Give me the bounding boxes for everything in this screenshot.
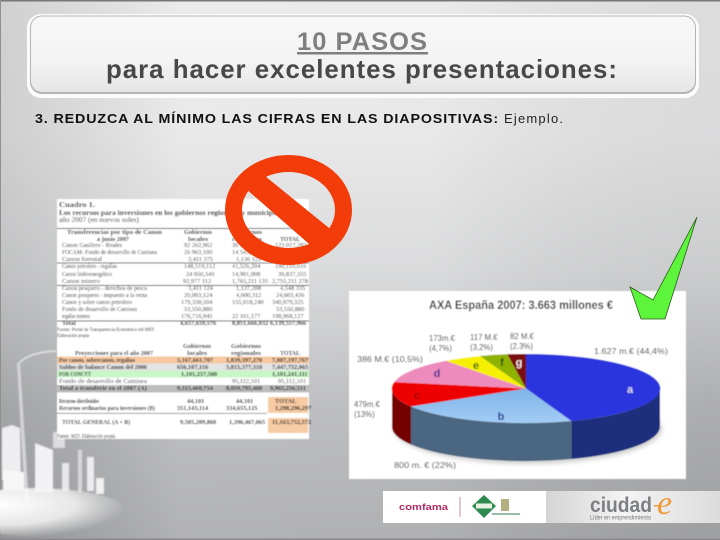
logo: ciudad-e: Líder en emprendimiento <box>590 516 652 522</box>
value labels: 173m.€ <box>429 334 456 343</box>
table lower rows: TOTAL <box>280 350 300 357</box>
table lower rows: Gobiernos <box>183 343 212 350</box>
value labels: 82 M.€ <box>510 332 534 341</box>
slice letters <box>414 357 634 423</box>
table lower rows: 95,112,101 <box>232 378 260 385</box>
table upper rows: regionales <box>232 236 263 243</box>
pie sides <box>392 388 660 461</box>
table upper rows: Gobiernos <box>232 229 263 236</box>
table upper rows <box>57 229 308 339</box>
table upper rows: TOTAL <box>280 236 300 243</box>
data table: dense figures to avoid: Fuente: MEF. Elaboración propia <box>57 433 115 440</box>
table upper rows: 30 754,321 <box>232 242 260 249</box>
table heading: año 2007 (en nuevos soles) <box>59 216 140 224</box>
pie shadow <box>394 394 662 464</box>
table lower rows: TOTAL <box>275 398 296 405</box>
table lower rows: 1,101,241,111 <box>272 371 308 378</box>
value labels <box>354 332 668 470</box>
table upper rows: 198,968,127 <box>272 313 303 320</box>
table upper rows: Canon pesquero - impuesto a la renta <box>62 292 147 299</box>
table lower rows: locales <box>187 350 208 357</box>
table upper rows: locales <box>188 236 209 243</box>
slice letters: g <box>516 357 522 369</box>
value labels: (2.3%) <box>510 342 533 351</box>
table upper rows: 14 545,210 <box>232 249 260 256</box>
table heading: Los recursos para inversiones en los gobiernos regionales y municipalidades <box>59 209 299 217</box>
table colored rows <box>57 356 309 433</box>
subheading: Ejemplo. <box>504 111 563 126</box>
table upper rows: 4,547 500 <box>280 256 305 263</box>
value labels: (13%) <box>354 410 375 419</box>
table upper rows: 4,548 335 <box>280 285 305 292</box>
table upper rows: 4,600,312 <box>236 292 261 299</box>
table lower rows: 9,115,460,754 <box>177 385 214 392</box>
subheading: 3. REDUZCA AL MÍNIMO LAS CIFRAS EN LAS DIAPOSITIVAS: <box>35 111 499 126</box>
table upper rows: 6,139,557,966 <box>270 320 306 327</box>
value labels: (4,7%) <box>429 344 452 353</box>
table upper rows: 92,977 112 <box>183 278 211 285</box>
table upper rows: 179,330,504 <box>181 299 213 306</box>
logo: ciudad-e: ciudad <box>590 494 652 517</box>
table heading: Cuadro 1. <box>59 201 95 209</box>
table lower rows: 11,163,752,572 <box>272 419 311 426</box>
table lower rows: 334,655,125 <box>226 405 257 412</box>
table upper rows: 26 963,100 <box>184 249 212 256</box>
title line 2: para hacer excelentes presentaciones: <box>106 54 618 84</box>
table lower rows: 5,815,377,310 <box>226 364 262 371</box>
table lower rows: Recursos distribuidos <box>59 398 99 405</box>
table upper rows: 24,603,436 <box>276 292 304 299</box>
table heading <box>59 201 299 224</box>
table upper rows: 24 050,340 <box>186 271 214 278</box>
value labels: 800 m. € (22%) <box>394 461 456 470</box>
table upper rows: Transferencias por tipo de Canon <box>67 229 163 236</box>
table upper rows: 3,411 375 <box>188 256 213 263</box>
table upper rows: 14,901,008 <box>232 271 260 278</box>
table lower rows: Gobiernos <box>231 343 262 350</box>
slice letters: f <box>500 357 504 369</box>
table upper rows: 148,519,112 <box>184 263 215 270</box>
value labels: 1.627 m.€ (44,4%) <box>594 347 668 356</box>
slice letters: e <box>473 360 479 372</box>
data table: dense figures to avoid <box>57 199 311 440</box>
table upper rows: 22 161,177 <box>232 313 260 320</box>
table upper rows: Canon y sobre canon petrolero <box>62 299 132 306</box>
table lower rows: Por canon, sobrecanon, regalías <box>59 357 135 364</box>
table upper rows: 155,018,240 <box>232 299 263 306</box>
table upper rows: 1,137,208 <box>236 285 261 292</box>
table lower rows: Total a transferir en el 2007 (A) <box>59 385 147 392</box>
slice letters: b <box>498 411 505 423</box>
table lower rows: 5,167,661,707 <box>177 357 213 364</box>
table lower rows <box>59 343 311 426</box>
table upper rows: 2,755,211 278 <box>272 278 308 285</box>
slice letters: d <box>434 368 440 380</box>
table lower rows: 9,505,209,860 <box>180 419 216 426</box>
title line 1: 10 PASOS <box>297 28 428 56</box>
table rules <box>57 228 309 414</box>
slice letters: c <box>414 390 420 402</box>
table lower rows: TOTAL GENERAL (A + B) <box>62 419 130 426</box>
table upper rows: 340,979,325 <box>272 299 303 306</box>
table lower rows: 656,107,116 <box>177 364 208 371</box>
slice letters: a <box>627 384 634 396</box>
logo: ciudad-e <box>590 485 672 522</box>
table lower rows: 1,839,397,270 <box>226 357 262 364</box>
table upper rows: Total <box>62 320 76 327</box>
value labels: 117 M.€ <box>470 333 498 342</box>
table upper rows: Canon Gasífero - Reales <box>62 242 123 249</box>
table lower rows: Recursos ordinarios para inversiones (B) <box>59 405 155 412</box>
table upper rows: 123 017,283 <box>275 242 306 249</box>
table upper rows: Canon forestal <box>62 256 102 263</box>
table upper rows: Canon hidroenergético <box>62 271 112 278</box>
table lower rows: 7,007,197,767 <box>272 357 308 364</box>
table upper rows: Fuente: Portal de Transparencia Económica del MEF. <box>57 328 155 333</box>
table upper rows: Gobiernos <box>184 229 213 236</box>
pie chart card <box>349 291 686 479</box>
logo strip <box>383 485 720 523</box>
table upper rows: 20,003,124 <box>184 292 213 299</box>
table lower rows: 44,101 <box>236 398 253 405</box>
table lower rows: 351,143,114 <box>177 405 209 412</box>
table upper rows: 53,550,880 <box>276 306 304 313</box>
icon: prohibition sign <box>234 164 344 256</box>
table lower rows: Saldos de balance Canon del 2006 <box>59 364 147 371</box>
chart title: AXA España 2007: 3.663 millones € <box>429 300 614 312</box>
title panel <box>27 14 699 98</box>
table upper rows: 41,526,204 <box>232 263 261 270</box>
table upper rows: Canon pesquero - derechos de pesca <box>62 285 147 292</box>
logo: ciudad-e: e <box>657 485 672 522</box>
table upper rows: 1,765,211 135 <box>232 278 268 285</box>
table lower rows: regionales <box>231 350 262 357</box>
table upper rows: 4,657,659,576 <box>180 320 216 327</box>
table upper rows: 39,837,355 <box>278 271 306 278</box>
table lower rows: FOR CONCYT <box>59 371 92 378</box>
table lower rows: 1,101,257,500 <box>181 371 217 378</box>
table upper rows: 8,851,666,032 <box>232 320 268 327</box>
table lower rows: Fondo de desarrollo de Camisea <box>59 378 147 385</box>
table upper rows: 1,136 125 <box>236 256 261 263</box>
table upper rows: Canon minero <box>62 278 100 285</box>
table upper rows: FOCAM- Fondo de desarrollo de Camisea <box>62 249 157 256</box>
table lower rows: 44,101 <box>187 398 204 405</box>
table upper rows: 190,110,016 <box>275 263 306 270</box>
table upper rows: a junio 2007 <box>97 236 129 243</box>
table upper rows: Canon petrolero - regalías <box>62 263 117 270</box>
table upper rows: 176,716,945 <box>181 313 212 320</box>
table lower rows: 9,965,256,511 <box>270 385 306 392</box>
pie slices <box>392 354 660 423</box>
value labels: 479m.€ <box>354 400 381 409</box>
table lower rows: 7,447,752,065 <box>272 364 308 371</box>
table lower rows: 95,112,101 <box>278 378 306 385</box>
table lower rows: 1,298,296,297 <box>275 405 311 412</box>
table lower rows: Proyecciones para el año 2007 <box>75 350 153 357</box>
logo: comfama: comfama <box>399 502 449 513</box>
table upper rows: 53,550,880 <box>184 306 212 313</box>
table upper rows: 3,411 124 <box>188 285 214 292</box>
background city scene <box>0 351 127 536</box>
value labels: (3,2%) <box>470 343 493 352</box>
icon: green check mark <box>630 217 697 319</box>
value labels: 386 M.€ (10,5%) <box>357 355 423 364</box>
table lower rows: 8,059,795,460 <box>226 385 262 392</box>
table upper rows: Elaboración propia <box>57 334 90 339</box>
table upper rows: 41 508,310 <box>275 249 303 256</box>
logo: green diamond seal <box>472 495 520 518</box>
table lower rows: 1,396,467,065 <box>229 419 265 426</box>
table upper rows: regalías mineras <box>62 313 90 320</box>
table upper rows: Fondo de desarrollo de Camisea <box>62 306 137 313</box>
table upper rows: 92 262,962 <box>184 242 212 249</box>
